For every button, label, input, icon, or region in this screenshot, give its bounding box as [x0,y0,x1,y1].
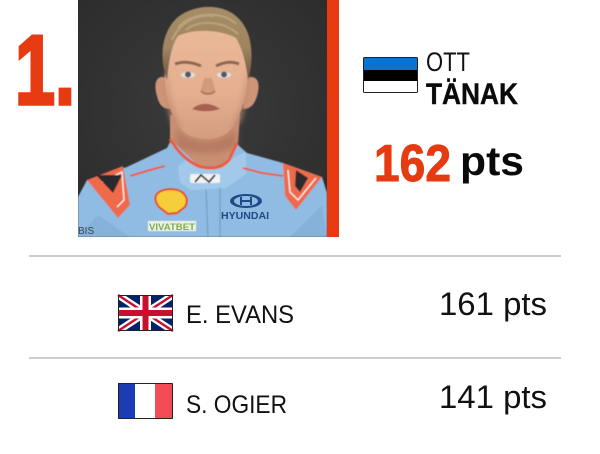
flag: France [118,383,173,419]
divider [29,357,561,359]
points: 161 pts [439,286,547,322]
shoulder patch left [87,166,130,218]
collar [178,152,246,190]
suit panel shade [78,205,327,237]
hyundai logo [222,194,268,219]
n logo [190,174,220,183]
nose and mouth [201,78,215,94]
driver portrait [78,0,327,237]
hyundai logo: HYUNDAI [221,210,269,222]
rank number: 1. [15,15,75,125]
driver name: S. OGIER [186,391,287,419]
row: third place [118,379,547,419]
leader points [374,135,524,193]
leader points: 162 [374,135,451,193]
orange accent bar [327,0,339,237]
eyes and brows [175,62,239,66]
driver portrait: VIVATBET [149,222,195,233]
face [165,28,248,139]
leader name: TÄNAK [426,78,518,111]
hair [162,7,252,80]
neck [170,115,240,166]
ears [155,77,259,109]
flag: United Kingdom [118,295,173,331]
leader name: OTT [426,47,470,77]
vivatbet badge [148,221,196,231]
race suit [78,140,327,237]
points: 141 pts [439,379,547,415]
sponsor fragment: BIS [78,226,94,237]
leader points: pts [460,138,524,184]
driver name: E. EVANS [186,301,294,329]
divider [29,255,561,257]
row: second place [118,286,547,331]
leader name [426,47,518,111]
shell logo [155,189,187,214]
shoulder patch right [283,163,322,210]
flag: Estonia [364,58,418,92]
